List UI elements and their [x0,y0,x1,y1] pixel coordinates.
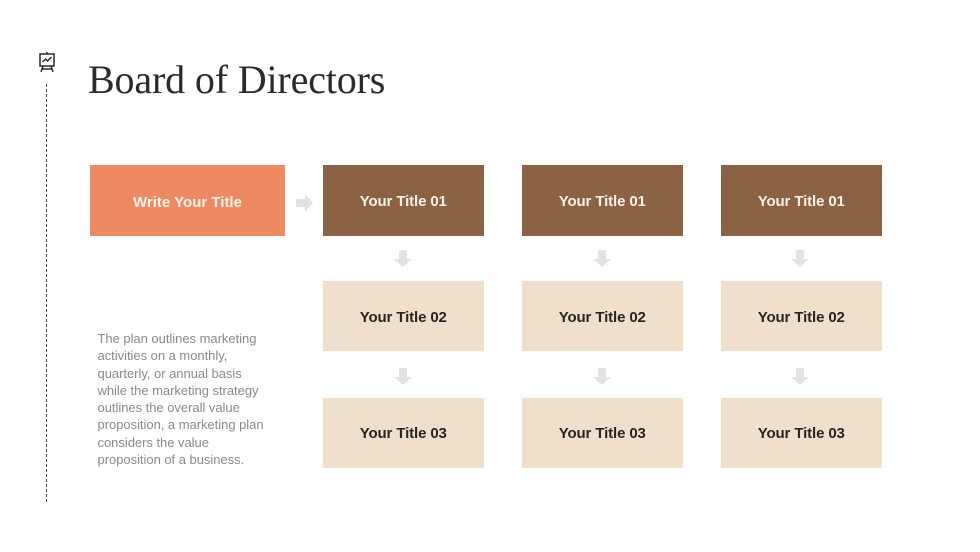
box: title 02 [323,281,484,351]
box: title 03: Your Title 03 [758,425,845,442]
box: title 03: Your Title 03 [360,425,447,442]
box: title 03: Your Title 03 [559,425,646,442]
arrow: down [791,250,809,267]
arrow: down [593,368,611,385]
description text [98,331,264,467]
icon: presentation board [39,52,55,72]
description text: quarterly, or annual basis [98,366,242,381]
box: title 01 [323,165,484,236]
box: title 01: Your Title 01 [758,193,845,210]
column 1 [323,165,484,468]
box: title 01 [721,165,882,236]
description text: while the marketing strategy [98,383,259,398]
box: title 02: Your Title 02 [559,308,646,326]
box: write your title: Write Your Title [133,194,242,211]
arrow: down [394,250,412,267]
box: title 02: Your Title 02 [758,308,845,326]
box: title 01: Your Title 01 [559,193,646,210]
column 3 [721,165,882,468]
description text: considers the value [98,435,209,450]
description text: activities on a monthly, [98,348,227,363]
title: Board of Directors [88,57,385,102]
box: title 03 [323,398,484,468]
description text: The plan outlines marketing [98,331,256,346]
box: title 03 [721,398,882,468]
description text: outlines the overall value [98,400,240,415]
arrow: down [394,368,412,385]
box: title 01 [522,165,682,236]
arrow: right [296,194,313,212]
box: title 03 [522,398,682,468]
box: title 01: Your Title 01 [360,193,447,210]
box: title 02: Your Title 02 [360,308,447,326]
box: write your title [90,165,285,236]
description text: proposition of a business. [98,452,244,467]
column 2 [522,165,683,468]
box: title 02 [522,281,682,351]
arrow: down [791,368,809,385]
description text: proposition, a marketing plan [98,417,264,432]
box: title 02 [721,281,882,351]
arrow: down [593,250,611,267]
dashed timeline line [46,84,47,502]
